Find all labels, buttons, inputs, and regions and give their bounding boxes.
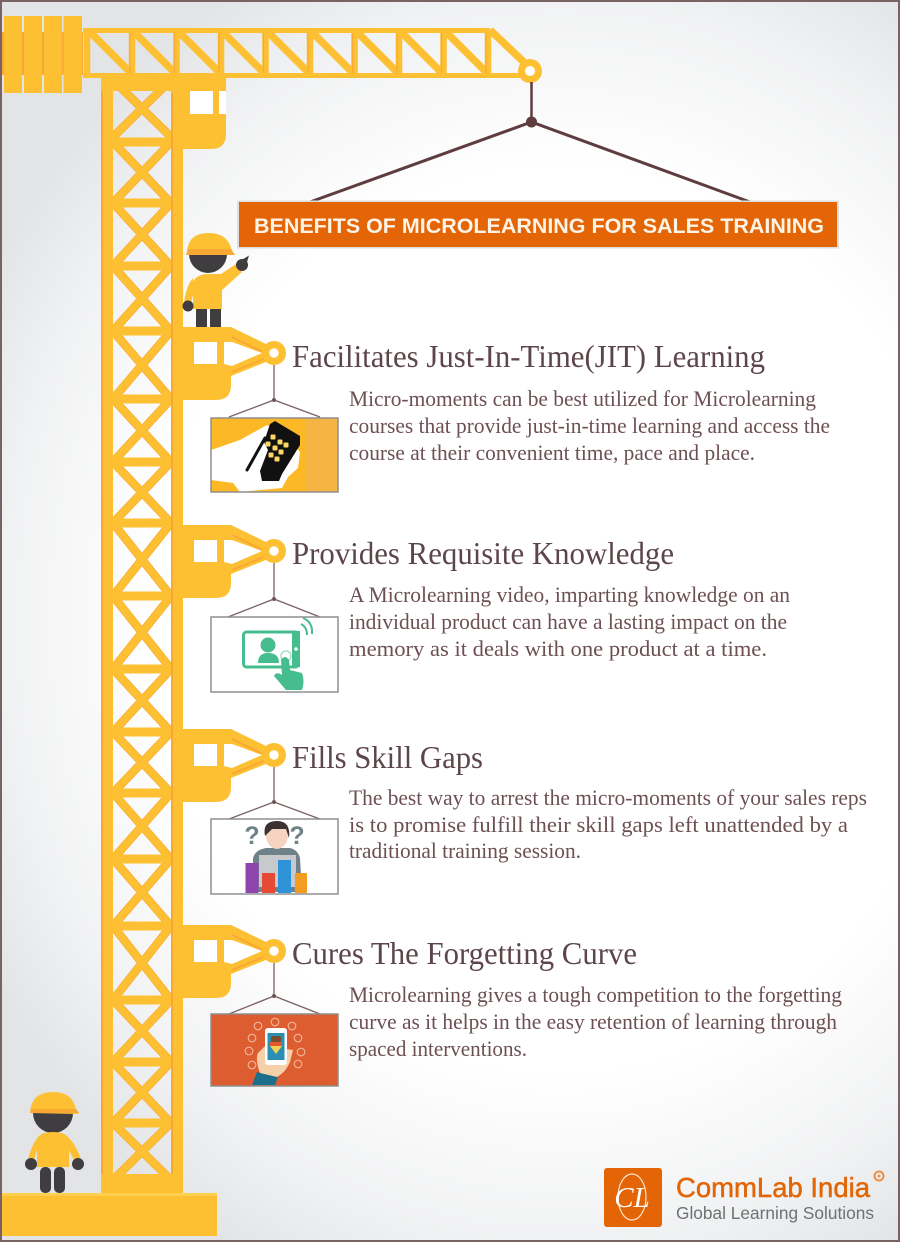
image: confused learner with bar chart bbox=[211, 819, 338, 894]
crane arm 1 bbox=[183, 327, 286, 400]
title banner: BENEFITS OF MICROLEARNING FOR SALES TRAINING bbox=[254, 214, 824, 238]
benefit 4 bbox=[183, 925, 842, 1086]
text block 3: traditional training session. bbox=[349, 838, 581, 863]
worker pointing at title bbox=[182, 233, 249, 327]
title hanger ropes bbox=[310, 82, 750, 202]
image: tablet with touch gesture bbox=[211, 617, 338, 692]
logo tagline: Global Learning Solutions bbox=[676, 1203, 874, 1223]
image: confused learner with bar chart: ? bbox=[289, 822, 305, 850]
counterweight bbox=[1, 16, 83, 93]
jib truss bbox=[83, 28, 542, 83]
text block 2: individual product can have a lasting impact on the bbox=[349, 609, 787, 634]
benefit 2 bbox=[183, 525, 790, 692]
crane arm 3 bbox=[183, 729, 286, 802]
heading 3: Fills Skill Gaps bbox=[292, 739, 483, 775]
heading 1: Facilitates Just-In-Time(JIT) Learning bbox=[292, 338, 765, 374]
text block 2: memory as it deals with one product at a time. bbox=[349, 636, 767, 661]
image: hand holding smartphone with app icons bbox=[211, 1014, 338, 1086]
text block 1: course at their convenient time, pace and place. bbox=[349, 440, 755, 465]
top cabin bbox=[101, 78, 226, 149]
text block 4: spaced interventions. bbox=[349, 1036, 527, 1061]
logo name: CommLab India bbox=[676, 1172, 870, 1203]
copyright mark bbox=[874, 1172, 884, 1180]
benefit 3 bbox=[183, 729, 867, 894]
text block 1 bbox=[349, 386, 830, 465]
heading 4: Cures The Forgetting Curve bbox=[292, 935, 637, 971]
hanger 4 bbox=[229, 963, 320, 1014]
worker standing on base bbox=[25, 1092, 84, 1193]
hanger 1 bbox=[229, 365, 320, 417]
text block 1: courses that provide just-in-time learning and access the bbox=[349, 413, 830, 438]
logo mark bbox=[604, 1168, 662, 1227]
logo mark: CL bbox=[614, 1182, 650, 1214]
crane tower and jib bbox=[1, 16, 542, 1236]
text block 2 bbox=[349, 582, 790, 661]
text block 2: A Microlearning video, imparting knowledge on an bbox=[349, 582, 790, 607]
hanger 3 bbox=[229, 767, 320, 819]
tower lattice bbox=[101, 78, 183, 1193]
text block 3: is to promise fulfill their skill gaps left unattended by a bbox=[349, 812, 848, 837]
text block 4: Microlearning gives a tough competition to the forgetting bbox=[349, 982, 842, 1007]
text block 1: Micro-moments can be best utilized for Microlearning bbox=[349, 386, 816, 411]
hanger 2 bbox=[228, 563, 320, 617]
text block 4 bbox=[349, 982, 842, 1061]
heading 2: Provides Requisite Knowledge bbox=[292, 535, 674, 571]
title banner bbox=[237, 200, 839, 248]
image: confused learner with bar chart: ? bbox=[244, 822, 260, 850]
text block 3: The best way to arrest the micro-moments of your sales reps bbox=[349, 785, 867, 810]
text block 3 bbox=[349, 785, 867, 863]
base platform bbox=[2, 1193, 217, 1236]
CommLab India logo bbox=[604, 1168, 884, 1227]
benefit 1 bbox=[183, 327, 830, 492]
image: hand holding phone bbox=[211, 418, 338, 492]
crane arm 4 bbox=[183, 925, 286, 998]
crane arm 2 bbox=[183, 525, 286, 598]
text block 4: curve as it helps in the easy retention of learning through bbox=[349, 1009, 837, 1034]
